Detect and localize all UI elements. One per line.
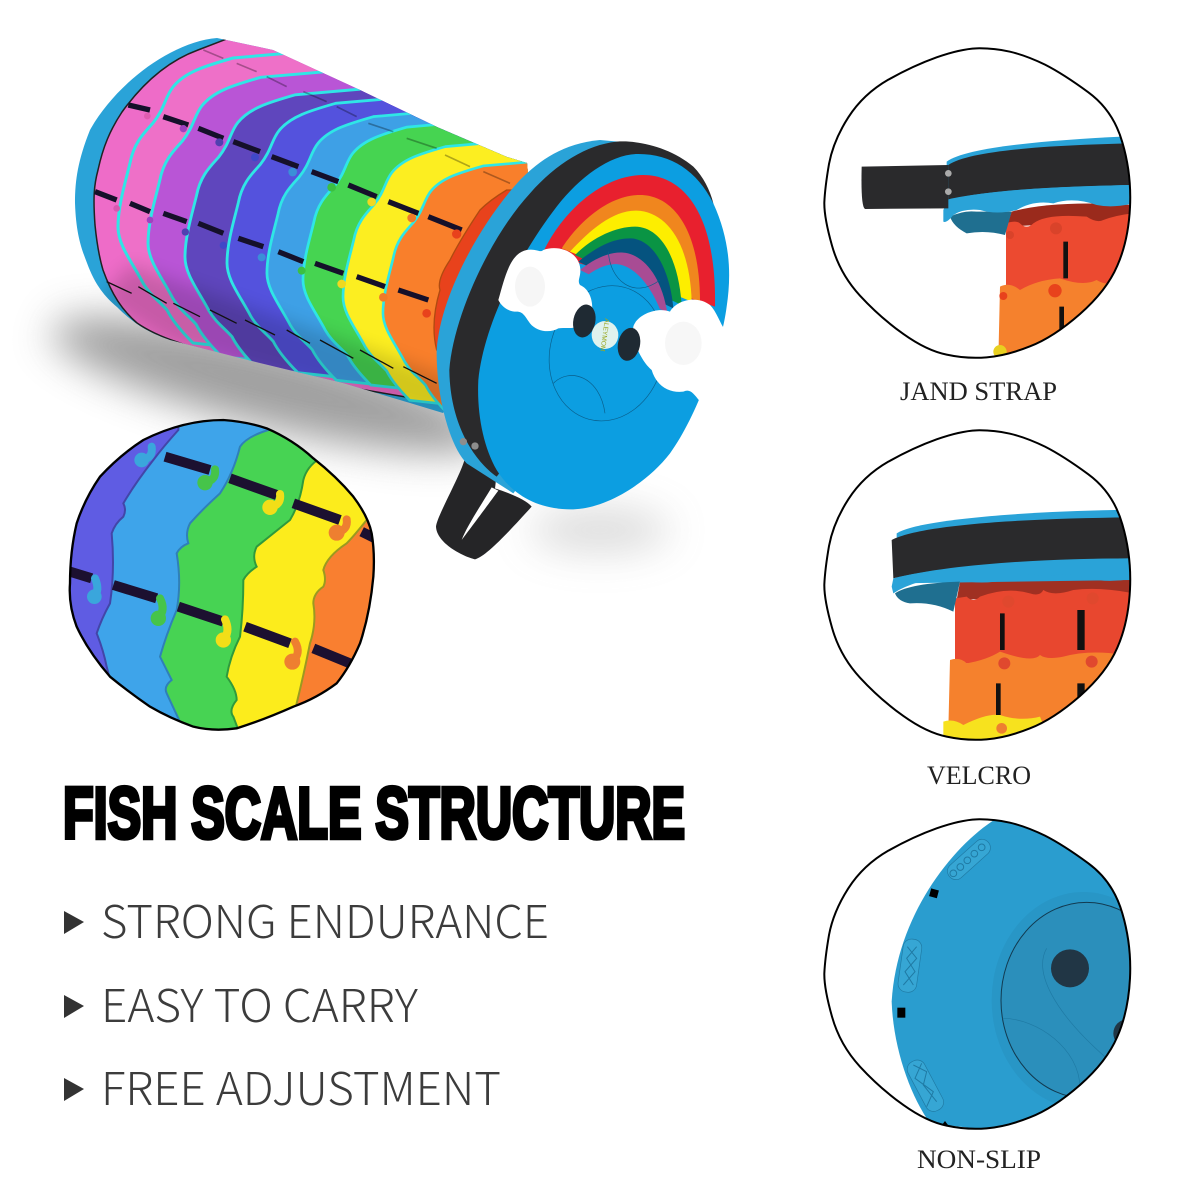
bullet list <box>64 886 549 1118</box>
bullet: easy to carry: EASY TO CARRY <box>101 970 418 1035</box>
non-slip pads <box>897 836 994 1114</box>
seat outlines <box>534 252 679 434</box>
callout: hand strap: JAND STRAP <box>900 377 1057 406</box>
folding stool illustration <box>74 38 730 560</box>
slots <box>70 457 375 663</box>
seat face <box>478 154 729 509</box>
callout: non-slip: NON-SLIP <box>917 1145 1041 1174</box>
strap rivets <box>460 438 479 450</box>
title: FISH SCALE STRUCTURE <box>63 774 685 854</box>
bullet: free adjustment: FREE ADJUSTMENT <box>101 1053 501 1118</box>
seat rim <box>437 140 663 493</box>
velcro band <box>449 141 713 477</box>
callout: velcro <box>824 430 1133 790</box>
stool seat <box>437 140 729 509</box>
callout: velcro: VELCRO <box>927 761 1031 790</box>
detail circle: fish scale closeup <box>68 418 376 731</box>
callout: non-slip <box>823 818 1132 1168</box>
centre logo <box>592 318 618 352</box>
shadow under stool <box>42 290 670 552</box>
left cloud <box>498 248 592 331</box>
bullet: strong endurance: STRONG ENDURANCE <box>101 886 549 951</box>
slots and hooks <box>95 50 527 383</box>
hooks <box>94 447 347 662</box>
hand strap loop <box>436 447 532 559</box>
red inner band <box>433 189 512 351</box>
underside shading <box>100 265 470 420</box>
screw holes <box>570 302 599 340</box>
right cloud <box>633 300 725 401</box>
rainbow fish-scale bands <box>93 39 528 413</box>
centre logo: ALEYMOM <box>598 318 610 352</box>
callout: hand strap <box>824 48 1133 406</box>
rainbow <box>543 175 715 314</box>
stool end rim <box>75 38 540 413</box>
